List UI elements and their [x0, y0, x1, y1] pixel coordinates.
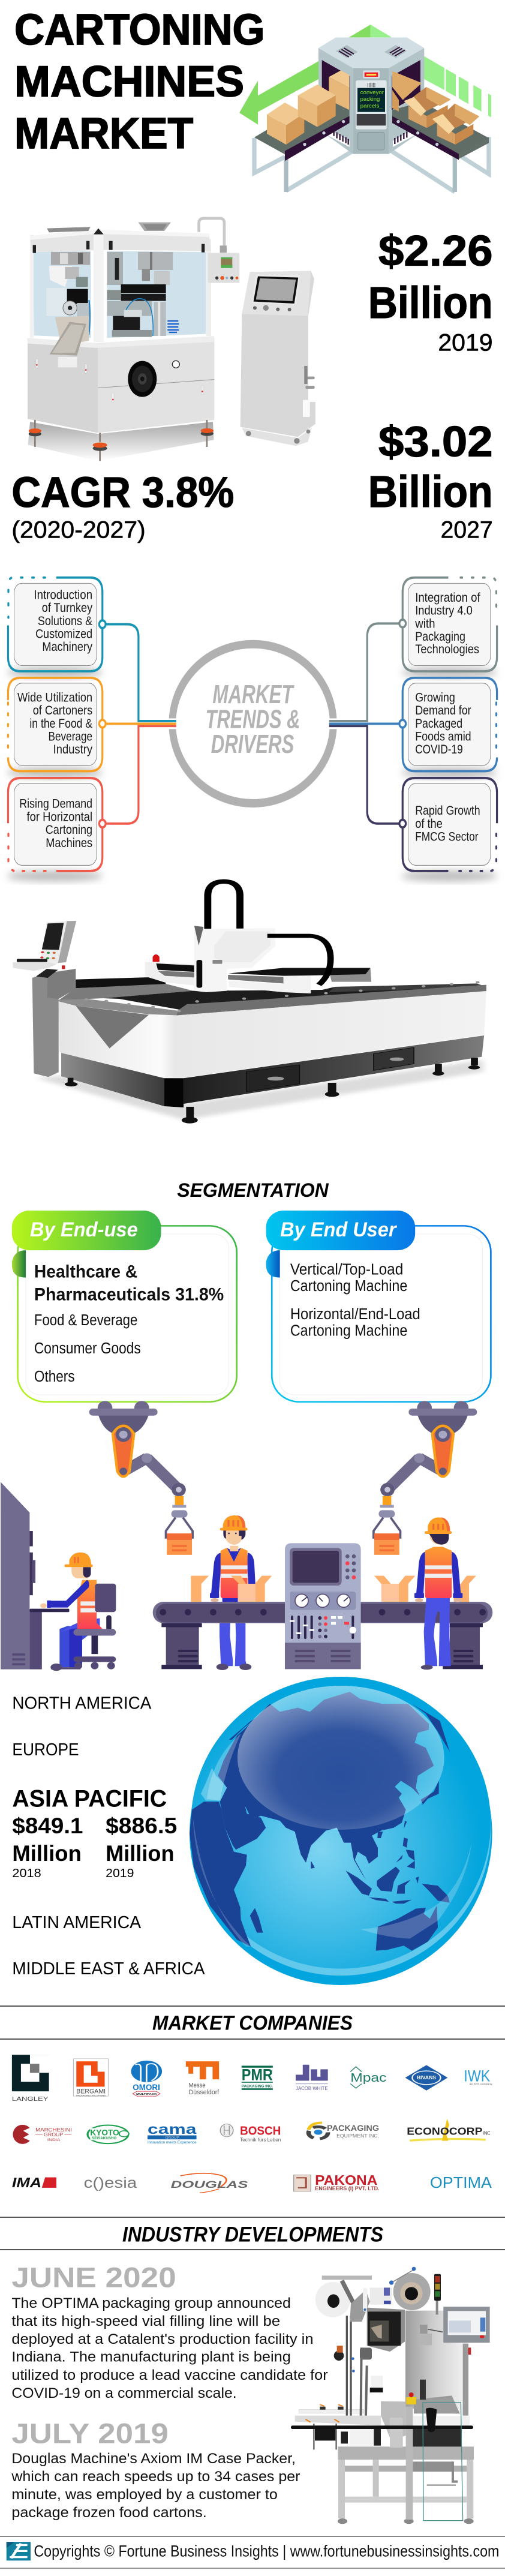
logo: Langley: LANGLEY — [12, 2095, 49, 2102]
development: July 2019: which can reach speeds up to 34 cases per — [11, 2469, 300, 2485]
logo: Coesia: c()esia — [84, 2175, 137, 2191]
logo: IMA: IMA — [12, 2175, 41, 2190]
development: July 2019: package frozen food cartons. — [11, 2505, 207, 2521]
logo: Omori — [131, 2061, 162, 2096]
driver: packaged foods demand: Growing — [415, 690, 455, 705]
logo: Econocorp: INC — [483, 2130, 490, 2136]
control panel — [285, 1543, 361, 1669]
driver: FMCG sector — [399, 778, 497, 871]
driver: food and beverage cartoners: of Cartoners — [33, 704, 92, 717]
driver: industry 4.0: Integration of — [415, 591, 480, 605]
logo: Cama Group: cama — [148, 2122, 197, 2137]
illustration: conveyor line with workers and control panel — [153, 1515, 492, 1670]
panel: by end user — [266, 1211, 491, 1402]
development: June 2020: The OPTIMA packaging group announced — [11, 2295, 291, 2311]
feet — [65, 1058, 480, 1124]
logo: Jacob White — [296, 2065, 328, 2091]
logo: Pakona: ENGINEERS (I) PVT. LTD. — [315, 2185, 380, 2191]
driver: horizontal cartoning machines: Rising Demand — [19, 797, 92, 811]
logo: Messe Dusseldorf — [186, 2061, 219, 2096]
stat: market size 2019 and 2027: 2019 — [438, 329, 493, 356]
machine photo: rotary cartoner with control kiosk — [27, 218, 315, 461]
asia pacific stats: $849.1 — [12, 1814, 83, 1838]
logo: Pakona — [294, 2172, 380, 2191]
logo: Bivans: BIVANS — [417, 2075, 436, 2080]
illustration: conveyor packing machine: parcels_ — [360, 103, 383, 109]
logo: Marchesini: INDIA — [47, 2137, 60, 2142]
panel: by end user: Cartoning Machine — [290, 1277, 407, 1295]
stat: market size 2019 and 2027 — [368, 227, 493, 543]
title: MARKET — [14, 109, 193, 158]
asia pacific stats: Million — [12, 1841, 82, 1866]
logo: Bosch: Technik fürs Leben — [240, 2137, 281, 2143]
stat: CAGR: CAGR 3.8% — [11, 469, 234, 517]
driver: turnkey solutions: Solutions & — [38, 614, 92, 628]
driver: packaged foods demand: Demand for — [415, 704, 471, 717]
illustration: conveyor packing machine: packing — [360, 96, 380, 102]
driver: FMCG sector: Rapid Growth — [415, 804, 480, 818]
driver: industry 4.0 — [399, 578, 497, 671]
driver: industry 4.0: Industry 4.0 — [415, 604, 473, 618]
central circle: TRENDS & — [206, 705, 300, 734]
driver: food and beverage cartoners: Wide Utilization — [17, 690, 92, 705]
asia pacific stats: $886.5 — [106, 1814, 177, 1838]
logo: Econocorp — [407, 2119, 490, 2141]
connector lines — [103, 623, 402, 824]
development: June 2020: JUNE 2020 — [11, 2262, 176, 2293]
driver: FMCG sector: FMCG Sector — [415, 830, 479, 844]
logo: IWK: an ATS company — [470, 2083, 492, 2085]
conveyor belt — [153, 1602, 492, 1623]
development: July 2019: Douglas Machine's Axiom IM Case Packer, — [11, 2451, 296, 2467]
logo: PMR — [242, 2065, 273, 2090]
panel: by end user: Vertical/Top-Load — [290, 1260, 403, 1278]
driver: food and beverage cartoners: Beverage — [49, 729, 92, 744]
icon: Fortune Business Insights logo — [7, 2542, 31, 2560]
regions list — [12, 1694, 205, 1978]
development: June 2020: COVID-19 on a commercial scale. — [11, 2385, 237, 2401]
logo: Jacob White: JACOB WHITE — [296, 2086, 328, 2091]
stat: CAGR — [11, 469, 234, 543]
development: July 2019 — [11, 2418, 300, 2521]
logo: Kyoto Seisakusho: SEISAKUSHO — [92, 2136, 116, 2140]
machine photo: laser cutting table — [13, 881, 486, 1124]
development: June 2020: that its high-speed vial filling line will be — [11, 2313, 280, 2329]
stat: CAGR: (2020-2027) — [11, 517, 146, 543]
logo: Mpac: Mpac — [350, 2071, 386, 2085]
gantry — [145, 881, 371, 993]
driver: horizontal cartoning machines: for Horizontal — [27, 810, 92, 824]
driver: food and beverage cartoners: Industry — [53, 743, 92, 757]
driver: packaged foods demand: COVID-19 — [415, 743, 463, 757]
development: June 2020: Indiana. The manufacturing plant is being — [11, 2349, 291, 2365]
driver: turnkey solutions — [8, 578, 106, 671]
panel: market trends and drivers — [7, 578, 498, 881]
stat: market size 2019 and 2027: 2027 — [441, 517, 493, 543]
driver: food and beverage cartoners — [8, 678, 106, 771]
regions list: EUROPE — [12, 1740, 79, 1760]
logo: Messe Dusseldorf: Düsseldorf — [189, 2089, 219, 2096]
logo: Omori: OMORI — [133, 2082, 160, 2092]
boxes on conveyor — [267, 70, 479, 145]
driver: industry 4.0: with — [414, 617, 435, 631]
heading: market companies: MARKET COMPANIES — [152, 2011, 353, 2034]
asia pacific stats: 2019 — [106, 1866, 134, 1880]
logo: Packaging Equipment: PACKAGING — [327, 2123, 379, 2133]
panel: by end-use: Consumer Goods — [34, 1340, 141, 1357]
logo: PMR: PACKAGING INC. — [242, 2083, 273, 2088]
central circle — [164, 644, 341, 803]
driver: food and beverage cartoners: in the Food & — [29, 716, 92, 731]
logo: Messe Dusseldorf: Messe — [189, 2082, 206, 2089]
logo: Kyoto Seisakusho — [88, 2125, 129, 2143]
logo: Bivans — [405, 2065, 447, 2091]
logo: IWK — [464, 2067, 492, 2085]
central circle: MARKET — [212, 680, 294, 709]
worker back view — [414, 1517, 462, 1670]
logo: Pakona: PAKONA — [315, 2172, 377, 2188]
title: CARTONING — [14, 5, 264, 54]
panel: by end user: Horizontal/End-Load — [290, 1305, 420, 1323]
logo: Packaging Equipment — [308, 2122, 379, 2139]
development: July 2019: minute, was employed by a customer to — [11, 2487, 278, 2503]
driver: turnkey solutions: Machinery — [42, 640, 92, 654]
panel: by end-use: Food & Beverage — [34, 1311, 137, 1329]
globe: asia pacific view — [190, 1677, 492, 1985]
logo: Packaging Equipment: EQUIPMENT INC. — [336, 2133, 379, 2139]
regions list: LATIN AMERICA — [12, 1914, 141, 1932]
logo: Cama Group: Innovation meets Experience — [148, 2140, 197, 2144]
carton boxes — [191, 1576, 476, 1602]
driver: horizontal cartoning machines: Cartoning — [46, 823, 92, 837]
title: MACHINES — [14, 57, 244, 106]
development: June 2020: deployed at a Catalent's production facility in — [11, 2331, 314, 2347]
panel: by end user: Cartoning Machine — [290, 1322, 407, 1339]
driver: turnkey solutions: Customized — [35, 627, 92, 641]
asia pacific stats: 2018 — [12, 1866, 41, 1880]
control console — [13, 921, 76, 978]
driver: FMCG sector: of the — [415, 816, 443, 831]
logo: Cama Group — [148, 2122, 197, 2144]
development: June 2020 — [11, 2262, 328, 2401]
driver: industry 4.0: Packaging — [415, 630, 465, 644]
development: June 2020: utilized to produce a lead vaccine candidate for — [11, 2367, 328, 2383]
illustration: conveyor packing machine — [239, 25, 491, 192]
logo: Bergami: PACKAGING SOLUTIONS — [76, 2094, 106, 2097]
logo: Omori: MULTIPACK — [136, 2092, 157, 2095]
logo: Bergami: BERGAMI — [76, 2088, 106, 2095]
driver: industry 4.0: Technologies — [415, 643, 479, 656]
driver: packaged foods demand — [399, 678, 497, 771]
rear dark bed and gantry rails — [59, 968, 486, 1010]
regions list: MIDDLE EAST & AFRICA — [12, 1959, 205, 1978]
logo: PMR: PMR — [242, 2066, 273, 2083]
driver: packaged foods demand: Foods amid — [415, 729, 471, 744]
stat: market size 2019 and 2027: Billion — [368, 467, 493, 517]
logo: Kyoto Seisakusho: KYOTO — [90, 2128, 119, 2137]
panel: by end-use: Pharmaceuticals 31.8% — [34, 1285, 224, 1304]
illustration: robot arm right — [374, 1401, 477, 1555]
illustration: robot arm left — [89, 1401, 193, 1555]
illustration: conveyor packing machine: conveyor — [360, 89, 384, 95]
panel: by end user: By End User — [280, 1218, 397, 1241]
logo: Marchesini: GROUP — [44, 2132, 63, 2137]
logo: Marchesini — [13, 2125, 72, 2144]
asia pacific stats: ASIA PACIFIC — [12, 1785, 167, 1812]
stat: market size 2019 and 2027: Billion — [368, 278, 493, 328]
logo: Marchesini: MARCHESINI — [35, 2127, 72, 2133]
driver: turnkey solutions: of Turnkey — [42, 601, 92, 616]
logo: Douglas: DOUGLAS — [171, 2179, 248, 2190]
driver: turnkey solutions: Introduction — [34, 588, 92, 602]
company logos — [12, 2055, 492, 2193]
illustration: seated worker and console — [1, 1482, 116, 1671]
panel: by end-use: By End-use — [30, 1218, 138, 1241]
asia pacific stats: Million — [106, 1841, 175, 1866]
heading: segmentation: SEGMENTATION — [177, 1180, 329, 1202]
logo: Cama Group: GROUP — [165, 2136, 179, 2140]
asia pacific stats — [12, 1785, 177, 1880]
driver: packaged foods demand: Packaged — [415, 716, 462, 731]
development: July 2019: JULY 2019 — [11, 2418, 169, 2449]
logo: Langley — [12, 2055, 49, 2102]
panel: by end-use: Others — [34, 1368, 75, 1385]
driver: horizontal cartoning machines: Machines — [46, 836, 92, 850]
panel: by end-use: Healthcare & — [34, 1262, 137, 1281]
logo: Bosch — [220, 2124, 281, 2143]
worker front view — [210, 1515, 259, 1670]
logo: Mpac — [350, 2067, 386, 2088]
panel: by end-use — [12, 1211, 237, 1402]
central circle: DRIVERS — [211, 730, 294, 759]
stat: market size 2019 and 2027: $2.26 — [378, 227, 493, 275]
driver: horizontal cartoning machines — [8, 778, 106, 871]
machine photo: labeling machine — [291, 2267, 490, 2524]
logo: Bergami — [73, 2059, 108, 2097]
regions list: NORTH AMERICA — [12, 1694, 151, 1713]
stat: market size 2019 and 2027: $3.02 — [378, 418, 493, 466]
logo: Douglas — [171, 2173, 248, 2193]
bolts — [85, 981, 480, 1012]
logo: Bosch: BOSCH — [240, 2124, 281, 2137]
title — [14, 5, 264, 158]
